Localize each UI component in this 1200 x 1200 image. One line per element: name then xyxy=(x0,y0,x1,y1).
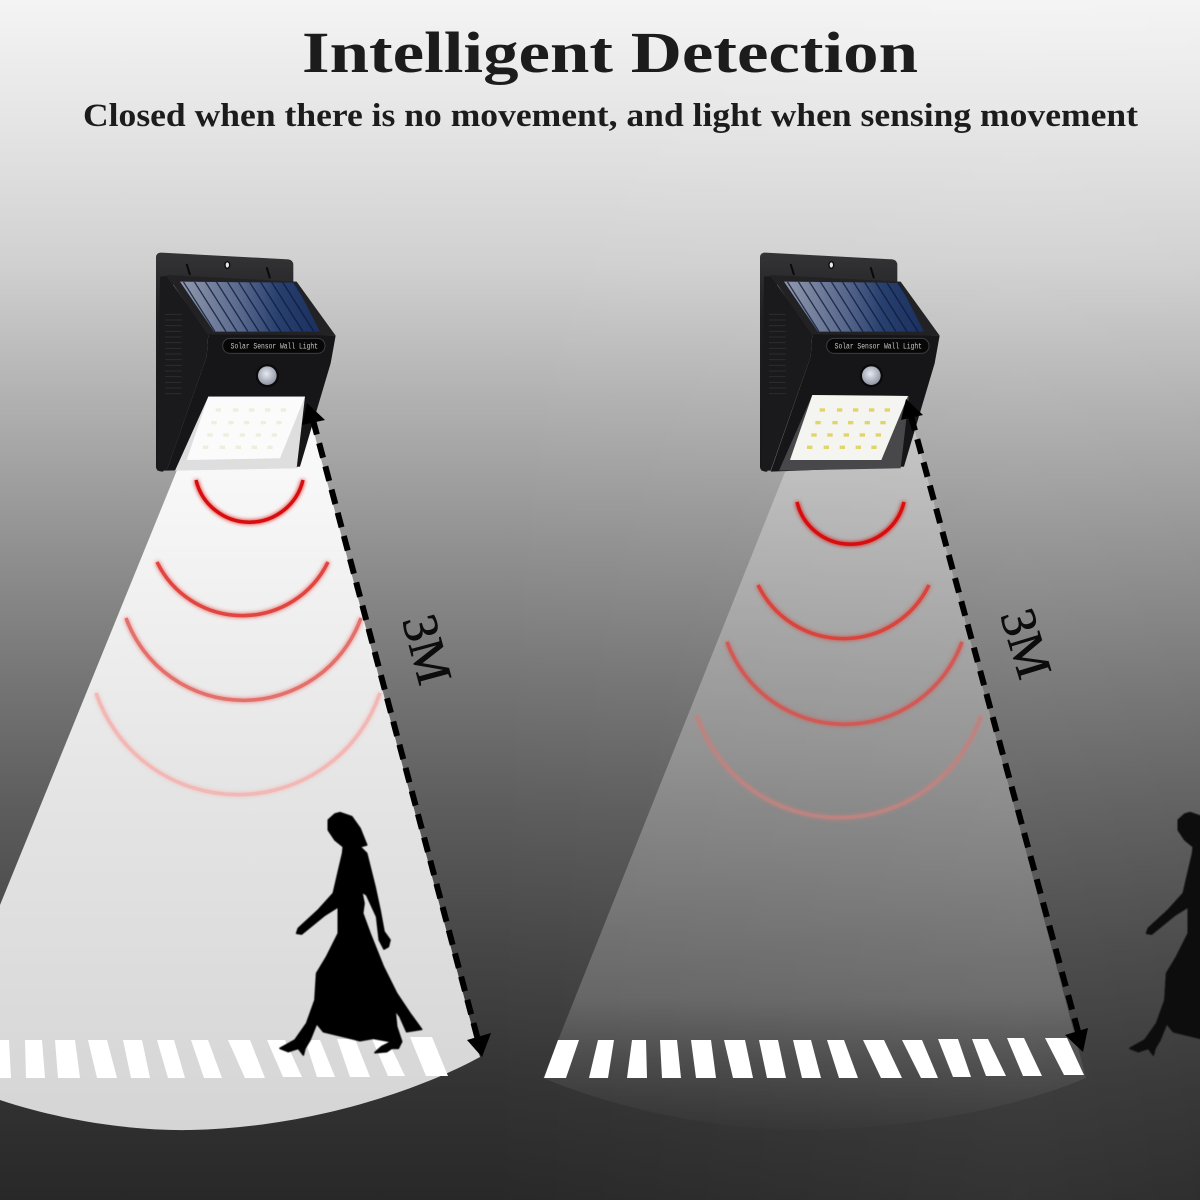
motion sensor xyxy=(256,364,279,387)
label: 3M left: 3M xyxy=(391,608,463,690)
light spill panel xyxy=(175,397,305,471)
sensor waves: right xyxy=(697,502,981,818)
housing top frame xyxy=(771,275,940,336)
side of housing xyxy=(157,276,208,471)
crosswalk: right xyxy=(544,1038,1084,1078)
panel: dim beam, no person xyxy=(543,420,1086,1130)
screw hole xyxy=(829,262,834,268)
housing front xyxy=(167,334,336,471)
panel: light beam, person detected xyxy=(0,425,480,1130)
arrow: left 3 metre distance xyxy=(302,403,491,1057)
subtitle: Closed when there is no movement, and light when sensing movement xyxy=(83,98,1138,134)
product label: Solar Sensor Wall Light xyxy=(231,341,318,351)
housing top frame xyxy=(167,275,336,336)
side of housing xyxy=(761,276,812,471)
product label: Solar Sensor Wall Light xyxy=(835,341,922,351)
LED panel xyxy=(187,397,305,460)
label: 3M right: 3M xyxy=(989,602,1063,685)
solar panel xyxy=(784,282,929,332)
product label xyxy=(223,338,325,353)
housing front xyxy=(771,334,940,472)
mounting plate xyxy=(760,253,897,472)
product label xyxy=(827,338,929,353)
screw hole xyxy=(225,262,230,268)
motion sensor xyxy=(860,364,883,387)
silhouette: woman outside beam xyxy=(1130,813,1200,1055)
solar lamp: unlit xyxy=(760,253,940,472)
sensor waves: left xyxy=(96,480,380,795)
solar lamp: lit xyxy=(156,253,336,472)
LED panel xyxy=(790,395,908,460)
crosswalk: left xyxy=(0,1037,448,1078)
silhouette: woman walking in beam xyxy=(280,813,422,1055)
lower lamp frame xyxy=(779,395,909,471)
title: Intelligent Detection xyxy=(302,20,918,85)
mounting plate xyxy=(156,253,293,472)
solar panel xyxy=(180,282,325,332)
arrow: right 3 metre distance xyxy=(901,399,1088,1052)
